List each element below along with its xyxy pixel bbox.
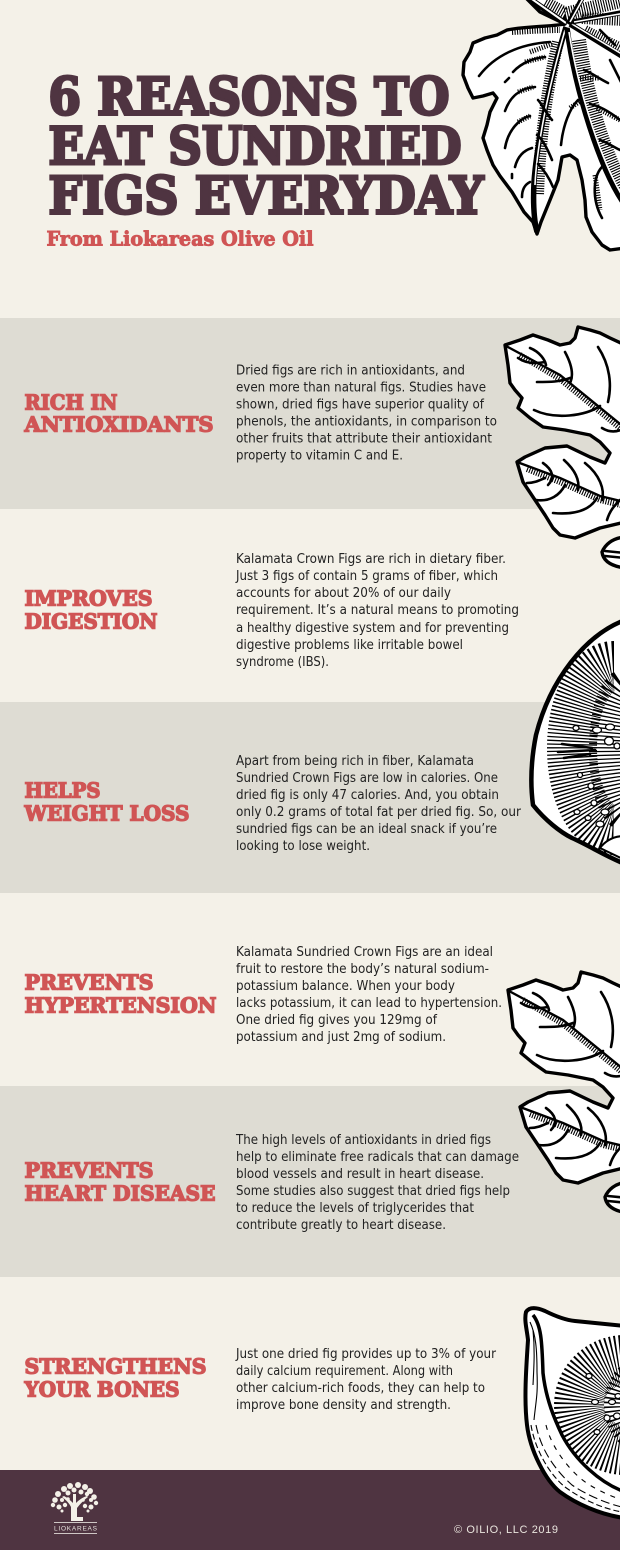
body text: sundried figs can be an ideal snack if you’re	[236, 822, 497, 837]
section 2: improves digestion	[24, 552, 519, 670]
heading	[24, 586, 158, 634]
body text: accounts for about 20% of our daily	[236, 586, 451, 601]
section 3: helps weight loss	[24, 754, 521, 854]
heading: HYPERTENSION	[24, 994, 216, 1018]
section 5: prevents heart disease	[24, 1133, 519, 1233]
body text	[235, 1347, 496, 1413]
heading: STRENGTHENS	[24, 1354, 206, 1378]
body text	[235, 1133, 519, 1233]
body text: potassium and just 2mg of sodium.	[236, 1030, 446, 1045]
body text: Just 3 figs of contain 5 grams of fiber, which	[235, 569, 498, 584]
body text: contribute greatly to heart disease.	[236, 1218, 446, 1233]
heading: YOUR BONES	[24, 1378, 179, 1402]
heading: IMPROVES	[24, 586, 152, 610]
section 1: rich in antioxidants	[23, 364, 497, 464]
body text: Kalamata Sundried Crown Figs are an ideal	[236, 945, 493, 960]
body text: The high levels of antioxidants in dried figs	[235, 1133, 491, 1148]
body text: only 0.2 grams of total fat per dried fig. So, our	[236, 805, 521, 820]
body text: dried fig is only 47 calories. And, you obtain	[236, 788, 499, 803]
body text: requirement. It’s a natural means to promoting	[236, 603, 519, 618]
heading	[24, 970, 216, 1018]
body text: blood vessels and result in heart disease.	[236, 1167, 484, 1182]
body text	[236, 364, 497, 464]
body text: fruit to restore the body’s natural sodium-	[236, 962, 489, 977]
body text: help to eliminate free radicals that can damage	[236, 1150, 519, 1165]
body text: digestive problems like irritable bowel	[236, 638, 463, 653]
heading: PREVENTS	[24, 970, 154, 994]
body text: potassium balance. When your body	[236, 979, 455, 994]
body text: Just one dried fig provides up to 3% of your	[235, 1347, 496, 1362]
body text	[236, 754, 521, 854]
body text: a healthy digestive system and for preventing	[236, 621, 509, 636]
illustration: top fig leaf	[463, 0, 620, 250]
body text: property to vitamin C and E.	[236, 448, 403, 464]
illustration: fig leaves (section 4–5)	[508, 972, 620, 1213]
illustration: fig leaves (section 1)	[505, 327, 620, 568]
logo: Liokareas tree	[51, 1482, 98, 1534]
heading	[24, 1158, 216, 1206]
heading	[24, 778, 189, 826]
body text: Sundried Crown Figs are low in calories. One	[236, 771, 498, 786]
title: EAT SUNDRIED	[48, 117, 462, 177]
title: 6 REASONS TO	[48, 68, 450, 128]
title: FIGS EVERYDAY	[48, 166, 484, 226]
illustration: fig half (bottom)	[525, 1308, 620, 1518]
illustration: cut fig (sections 2–3)	[531, 620, 620, 864]
body text	[236, 945, 502, 1045]
body text: even more than natural figs. Studies have	[236, 380, 486, 396]
logo: Liokareas tree: LIOKAREAS	[54, 1526, 98, 1532]
body text: shown, dried figs have superior quality of	[236, 398, 484, 412]
subtitle: From Liokareas Olive Oil	[46, 226, 314, 250]
body text: looking to lose weight.	[236, 839, 370, 854]
body text: One dried fig gives you 129mg of	[236, 1013, 437, 1028]
section 6: strengthens your bones	[24, 1347, 496, 1413]
body text: syndrome (IBS).	[236, 655, 329, 670]
body text: daily calcium requirement. Along with	[236, 1364, 453, 1379]
body text	[235, 552, 519, 670]
heading: HEART DISEASE	[24, 1182, 216, 1206]
body text: improve bone density and strength.	[236, 1398, 451, 1413]
heading	[24, 1354, 206, 1402]
body text: other fruits that attribute their antioxidant	[236, 432, 492, 446]
heading: WEIGHT LOSS	[24, 802, 189, 826]
title	[48, 68, 484, 226]
heading: HELPS	[24, 778, 100, 802]
section 4: prevents hypertension	[24, 945, 502, 1045]
footer band	[0, 1470, 620, 1550]
body text: Apart from being rich in fiber, Kalamata	[236, 754, 474, 769]
copyright: © OILIO, LLC 2019	[454, 1524, 558, 1536]
heading: ANTIOXIDANTS	[23, 412, 213, 436]
body text: Some studies also suggest that dried figs help	[236, 1184, 510, 1199]
body text: to reduce the levels of triglycerides that	[236, 1201, 474, 1216]
heading: RICH IN	[24, 390, 118, 414]
body text: Kalamata Crown Figs are rich in dietary fiber.	[236, 552, 506, 567]
heading	[23, 390, 213, 436]
heading: DIGESTION	[24, 610, 158, 634]
heading: PREVENTS	[24, 1158, 154, 1182]
body text: lacks potassium, it can lead to hypertension.	[236, 996, 502, 1011]
body text: other calcium-rich foods, they can help to	[236, 1381, 485, 1396]
body text: phenols, the antioxidants, in comparison to	[236, 414, 497, 430]
body text: Dried figs are rich in antioxidants, and	[236, 364, 465, 378]
